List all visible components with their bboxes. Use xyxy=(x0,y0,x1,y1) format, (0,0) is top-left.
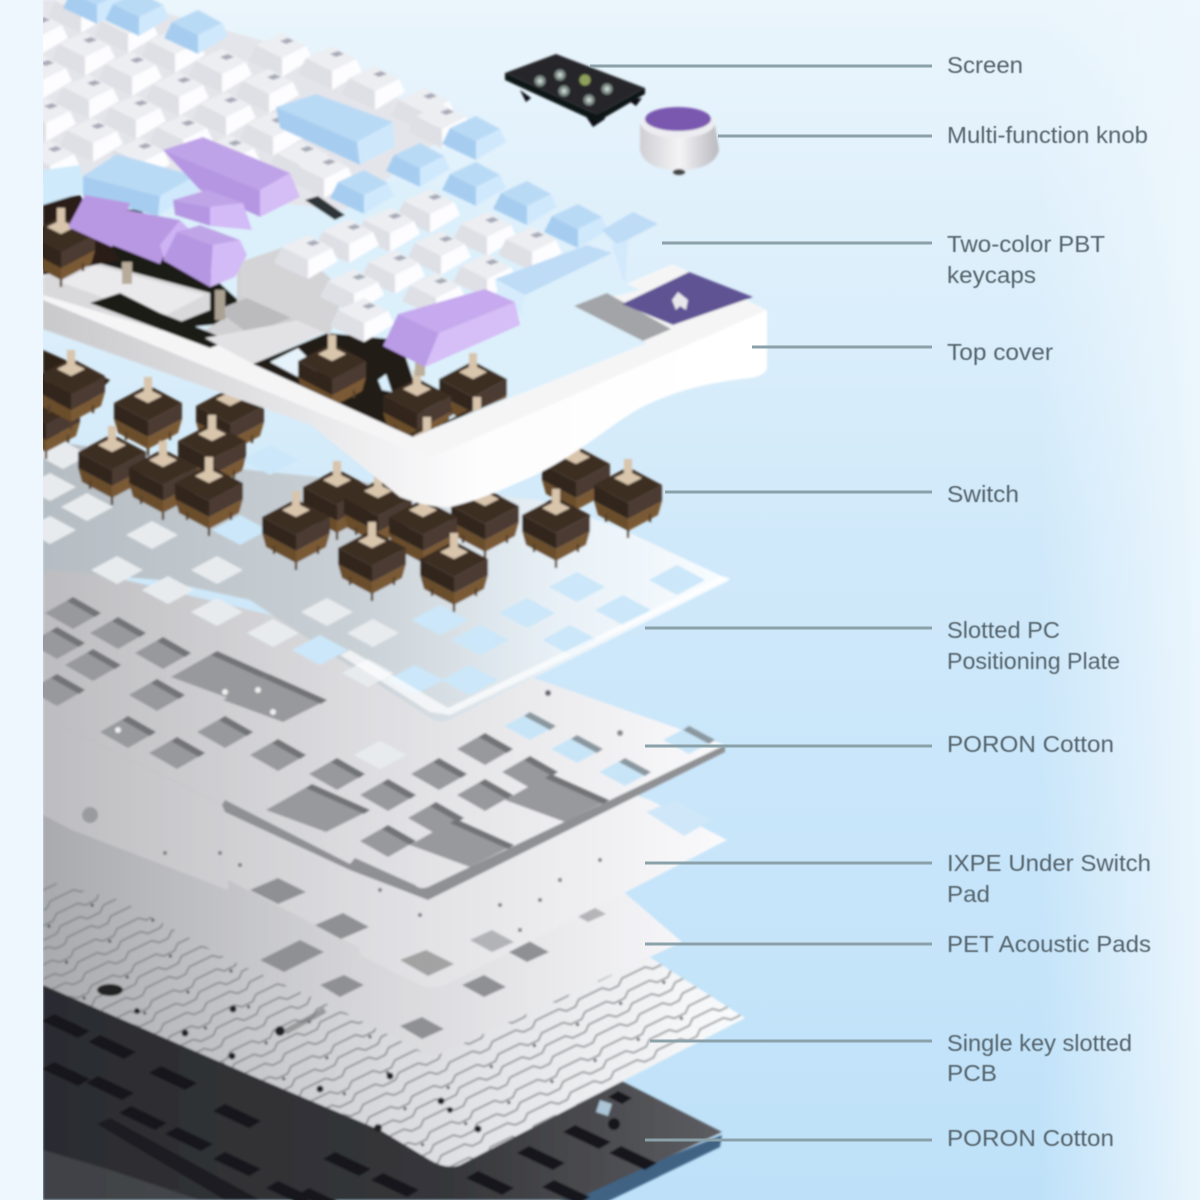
keycaps: purple wide key xyxy=(163,137,300,217)
screen well xyxy=(574,272,753,341)
leader lines xyxy=(590,66,932,1140)
well with switches xyxy=(252,332,508,438)
label: Slotted PC Positioning Plate: Positioning Plate xyxy=(947,648,1120,674)
label: PET Acoustic Pads: PET Acoustic Pads xyxy=(947,931,1151,957)
top cover xyxy=(43,180,767,507)
label: IXPE Under Switch Pad xyxy=(947,850,1151,907)
label: Screen: Screen xyxy=(947,52,1023,78)
label: Single key slotted PCB xyxy=(947,1030,1132,1086)
label: Two-color PBT keycaps: keycaps xyxy=(947,262,1036,288)
interior of the frame xyxy=(194,205,638,422)
two-color PBT keycaps xyxy=(4,0,658,367)
label: Two-color PBT keycaps: Two-color PBT xyxy=(947,231,1105,257)
keycaps: white lower cluster xyxy=(240,189,562,342)
layer: PET acoustic pads xyxy=(43,814,682,1054)
label: Top cover: Top cover xyxy=(947,339,1053,365)
keycaps: blue wide key xyxy=(83,154,200,216)
keycaps: white main block xyxy=(4,0,472,210)
label: Slotted PC Positioning Plate xyxy=(947,617,1120,674)
keycaps: blue spacebar xyxy=(494,244,611,296)
panel: exploded keyboard xyxy=(4,0,767,1200)
cover well: left grey block xyxy=(43,205,330,364)
label: PORON Cotton: PORON Cotton xyxy=(947,731,1114,757)
label: Switch: Switch xyxy=(947,481,1019,507)
layer: single key slotted PCB xyxy=(43,880,745,1167)
keycaps: purple cluster xyxy=(68,190,252,287)
label: Single key slotted PCB: Single key slotted xyxy=(947,1030,1132,1056)
keycaps: blue row top xyxy=(43,0,658,285)
layer: IXPE under switch pad xyxy=(43,700,727,988)
screen xyxy=(505,54,645,127)
label: IXPE Under Switch Pad: IXPE Under Switch xyxy=(947,850,1151,876)
label: Slotted PC Positioning Plate: Slotted PC xyxy=(947,617,1060,643)
layer: slotted PC positioning plate xyxy=(24,440,730,722)
label: Single key slotted PCB: PCB xyxy=(947,1060,997,1086)
layer: PORON cotton xyxy=(29,560,725,900)
layer: bottom PORON cotton xyxy=(42,970,722,1200)
label: Two-color PBT keycaps xyxy=(947,231,1105,288)
labels xyxy=(947,52,1151,1151)
label: IXPE Under Switch Pad: Pad xyxy=(947,881,990,907)
switches: lower group xyxy=(12,350,662,612)
keycap: purple front key xyxy=(383,289,520,367)
multi-function knob xyxy=(640,107,719,175)
label: PORON Cotton bottom: PORON Cotton xyxy=(947,1125,1114,1151)
switch dark mass behind keys xyxy=(27,195,425,376)
label: Multi-function knob: Multi-function knob xyxy=(947,122,1148,148)
